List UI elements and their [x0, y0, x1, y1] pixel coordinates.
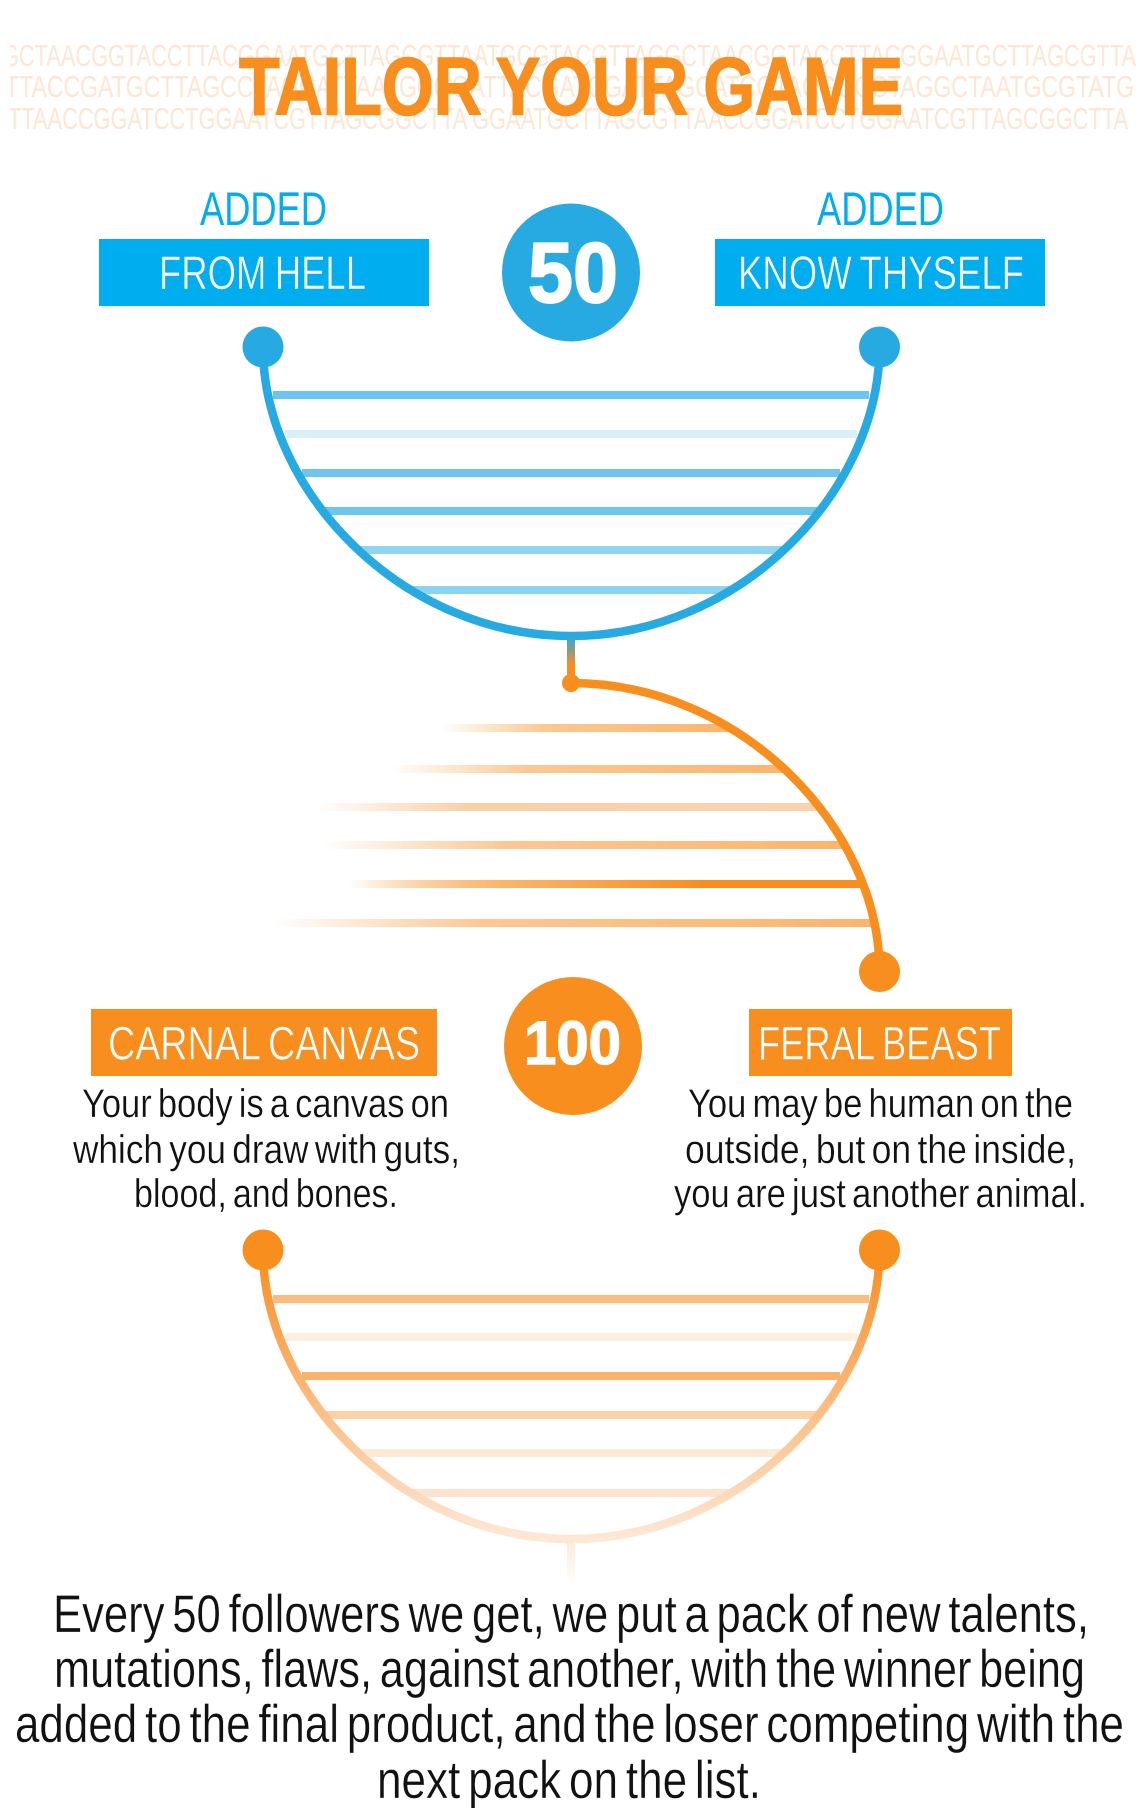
chart: orange fading helix bottom	[242, 1230, 900, 1586]
background DNA letter texture	[10, 44, 1136, 130]
tag: from hell	[99, 239, 429, 306]
tag: carnal canvas	[91, 1009, 437, 1076]
text: carnal canvas description: blood, and bones.	[134, 1172, 398, 1216]
chart: orange fading helix half	[273, 674, 900, 992]
label: added left: ADDED	[200, 182, 327, 235]
tag: feral beast	[749, 1009, 1012, 1076]
tag: feral beast: FERAL BEAST	[758, 1016, 1001, 1070]
badge: 50: 50	[528, 226, 618, 321]
text: bottom explanation	[15, 1585, 1124, 1808]
text: carnal canvas description: Your body is a canvas on	[82, 1082, 449, 1126]
badge: 100: 100	[524, 1009, 621, 1077]
text: feral beast description: You may be human on the	[688, 1082, 1073, 1126]
text: carnal canvas description	[72, 1082, 460, 1216]
panel: 50 followers options	[99, 182, 1045, 342]
text: feral beast description: you are just another animal.	[674, 1172, 1087, 1216]
label: added right: ADDED	[817, 182, 944, 235]
tag: from hell: FROM HELL	[159, 246, 366, 299]
tag: carnal canvas: CARNAL CANVAS	[108, 1016, 420, 1070]
connector: blue to orange	[567, 636, 575, 683]
text: feral beast description: outside, but on the inside,	[685, 1128, 1076, 1172]
badge: 100	[504, 977, 642, 1115]
text: feral beast description	[674, 1082, 1087, 1216]
chart: blue helix half	[242, 326, 900, 636]
panel: 100 followers options	[72, 977, 1087, 1216]
tag: know thyself	[715, 239, 1045, 306]
badge: 50	[502, 204, 640, 342]
tag: know thyself: KNOW THYSELF	[738, 246, 1024, 299]
title: TAILOR YOUR GAME	[239, 42, 903, 132]
text: carnal canvas description: which you draw with guts,	[72, 1128, 460, 1172]
